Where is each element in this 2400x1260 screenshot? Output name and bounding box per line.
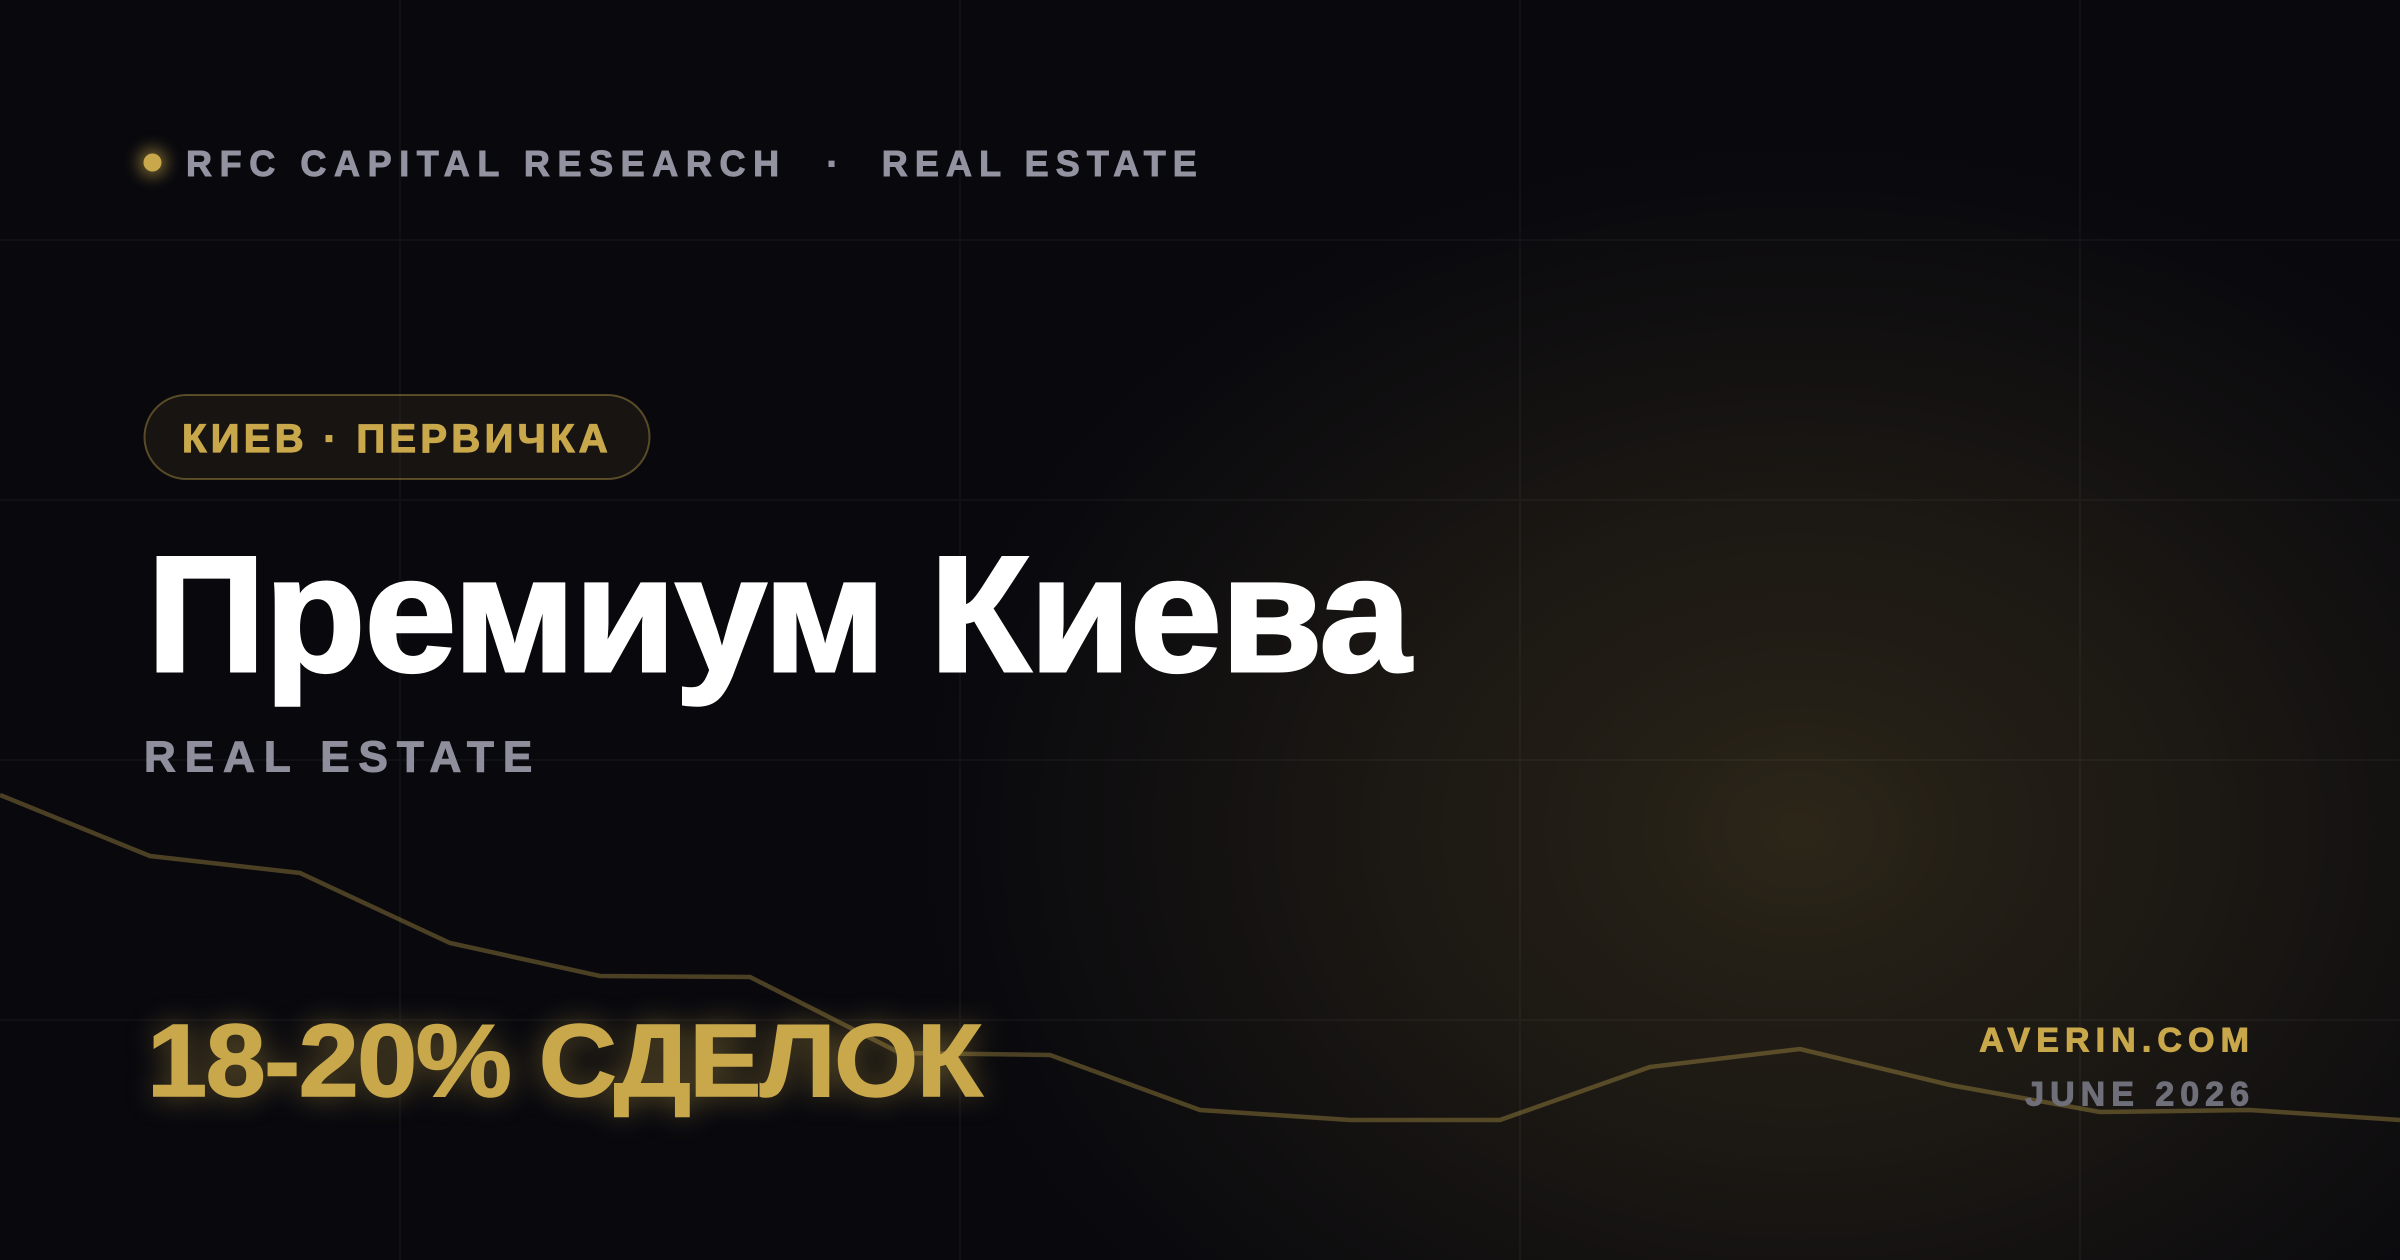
site name: AVERIN.COM [1979, 1022, 2255, 1060]
category pill [144, 395, 650, 479]
icon: gold dot [138, 148, 166, 176]
subtitle: REAL ESTATE [144, 732, 541, 782]
source text: RFC CAPITAL RESEARCH · REAL ESTATE [186, 143, 1204, 184]
key stat: 18-20% СДЕЛОК [147, 1003, 983, 1118]
title: Премиум Киева [147, 522, 1412, 706]
line chart [0, 795, 2400, 1120]
key stat: 18-20% СДЕЛОК [147, 1003, 983, 1118]
category pill: КИЕВ · ПЕРВИЧКА [182, 417, 612, 461]
date: JUNE 2026 [2025, 1076, 2255, 1114]
header: source line [138, 143, 1204, 184]
